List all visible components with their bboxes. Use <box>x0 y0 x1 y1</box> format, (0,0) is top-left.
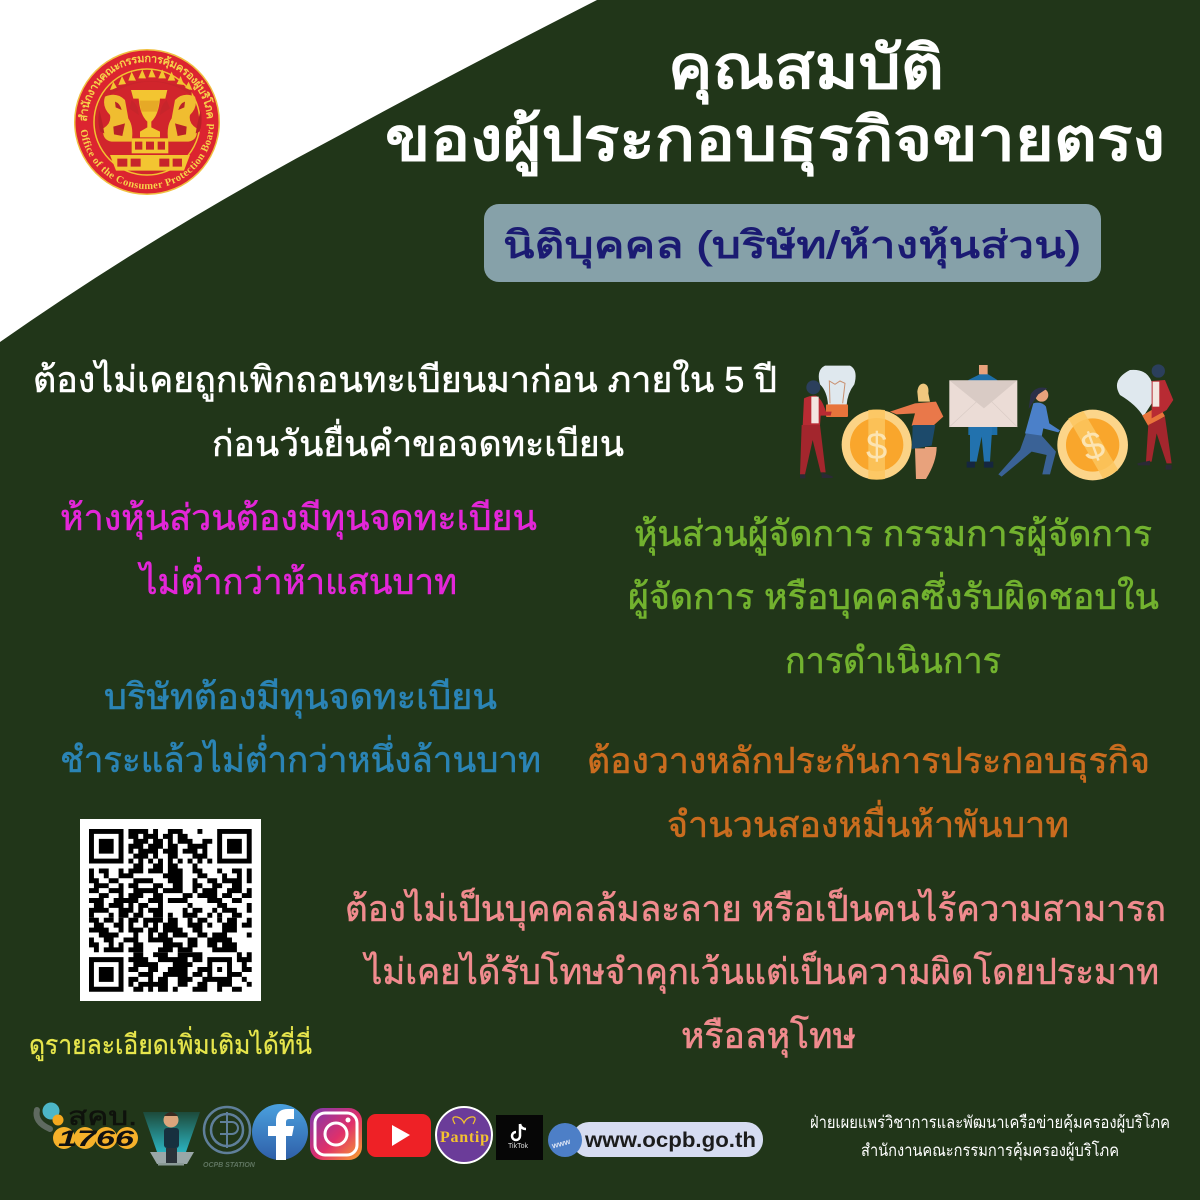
illustration: people with coins, bulbs and envelope: $ <box>866 425 887 468</box>
woman right <box>1152 364 1165 378</box>
logo: consumer protection board seal: สำนักงานคณะกรรมการคุ้มครองผู้บริโภค <box>78 56 214 121</box>
icon: ocpb circle logo: OCPB STATION <box>203 1162 256 1169</box>
text block: guarantee: จำนวนสองหมื่นห้าพันบาท <box>667 800 1069 845</box>
icon: hotline 1766: สคบ. <box>68 1101 137 1131</box>
bulb left <box>819 366 856 405</box>
icon: hotline 1766: 1766 <box>58 1126 135 1151</box>
text block: qualifications: หรือลหุโทษ <box>681 1015 856 1058</box>
website badge <box>548 1122 763 1157</box>
lions <box>103 95 132 142</box>
illustration: people with coins, bulbs and envelope: $ <box>1076 423 1111 470</box>
text block: managers: ผู้จัดการ หรือบุคคลซึ่งรับผิดชอบใน <box>628 572 1159 619</box>
text block: company capital: บริษัทต้องมีทุนจดทะเบียน <box>104 676 497 719</box>
urn <box>131 90 167 137</box>
icon: cartoon presenter <box>143 1112 200 1166</box>
base <box>132 138 168 153</box>
title line 2: ของผู้ประกอบธุรกิจขายตรง <box>385 106 1165 177</box>
text block: qualifications: ต้องไม่เป็นบุคคลล้มละลาย หรือเป็นคนไร้ความสามารถ <box>345 886 1166 931</box>
illustration: people with coins, bulbs and envelope <box>800 364 1173 480</box>
icon: facebook <box>252 1104 308 1160</box>
footer organisation credit: สำนักงานคณะกรรมการคุ้มครองผู้บริโภค <box>861 1140 1119 1161</box>
icon: tiktok: TikTok <box>508 1143 528 1150</box>
icon: instagram <box>310 1108 362 1160</box>
woman pushing coin <box>1035 388 1048 402</box>
subtitle pill <box>484 204 1101 282</box>
footer organisation credit <box>810 1112 1170 1161</box>
text block: qualifications: ไม่เคยได้รับโทษจำคุกเว้นแต่เป็นความผิดโดยประมาท <box>362 949 1159 994</box>
icon: ocpb circle logo <box>203 1107 256 1169</box>
text block: registration history: ก่อนวันยื่นคำขอจดทะเบียน <box>212 419 624 464</box>
text block: guarantee <box>587 740 1150 845</box>
logo: consumer protection board seal <box>74 49 220 195</box>
website badge: www <box>550 1137 572 1151</box>
icon: youtube <box>367 1114 431 1157</box>
man with envelope <box>968 373 997 435</box>
text block: guarantee: ต้องวางหลักประกันการประกอบธุรกิจ <box>587 740 1150 783</box>
qr code <box>80 819 261 1001</box>
text block: partnership capital <box>60 497 537 602</box>
text block: qualifications <box>345 886 1166 1058</box>
text block: managers <box>628 513 1159 681</box>
icon: pantip <box>436 1107 492 1163</box>
coin left <box>842 410 912 480</box>
logo: consumer protection board seal: Office of the Consumer Protection Board <box>80 124 214 190</box>
text block: registration history <box>33 359 777 464</box>
icon: pantip: Pantip <box>440 1129 489 1146</box>
text block: registration history: ต้องไม่เคยถูกเพิกถอนทะเบียนมาก่อน ภายใน 5 ปี <box>33 359 777 402</box>
white corner shape <box>0 0 597 342</box>
woman orange <box>917 384 930 402</box>
title line 1: คุณสมบัติ <box>668 34 944 105</box>
text block: partnership capital: ห้างหุ้นส่วนต้องมีทุนจดทะเบียน <box>60 497 537 540</box>
subtitle pill: นิติบุคคล (บริษัท/ห้างหุ้นส่วน) <box>503 225 1081 268</box>
woman left <box>806 380 820 394</box>
icon: tiktok <box>496 1115 543 1160</box>
text block: partnership capital: ไม่ต่ำกว่าห้าแสนบาท <box>137 557 457 602</box>
icon: hotline 1766 <box>37 1101 138 1151</box>
text block: managers: การดำเนินการ <box>785 640 1001 681</box>
text block: company capital: ชำระแล้วไม่ต่ำกว่าหนึ่งล้านบาท <box>60 735 541 780</box>
website badge: www.ocpb.go.th <box>584 1129 756 1152</box>
qr caption: ดูรายละเอียดเพิ่มเติมได้ที่นี่ <box>29 1026 312 1061</box>
flames arc <box>110 68 192 90</box>
bulb right <box>1117 370 1155 417</box>
text block: company capital <box>60 676 541 780</box>
coin right <box>1057 410 1128 480</box>
text block: managers: หุ้นส่วนผู้จัดการ กรรมการผู้จัดการ <box>634 513 1152 556</box>
